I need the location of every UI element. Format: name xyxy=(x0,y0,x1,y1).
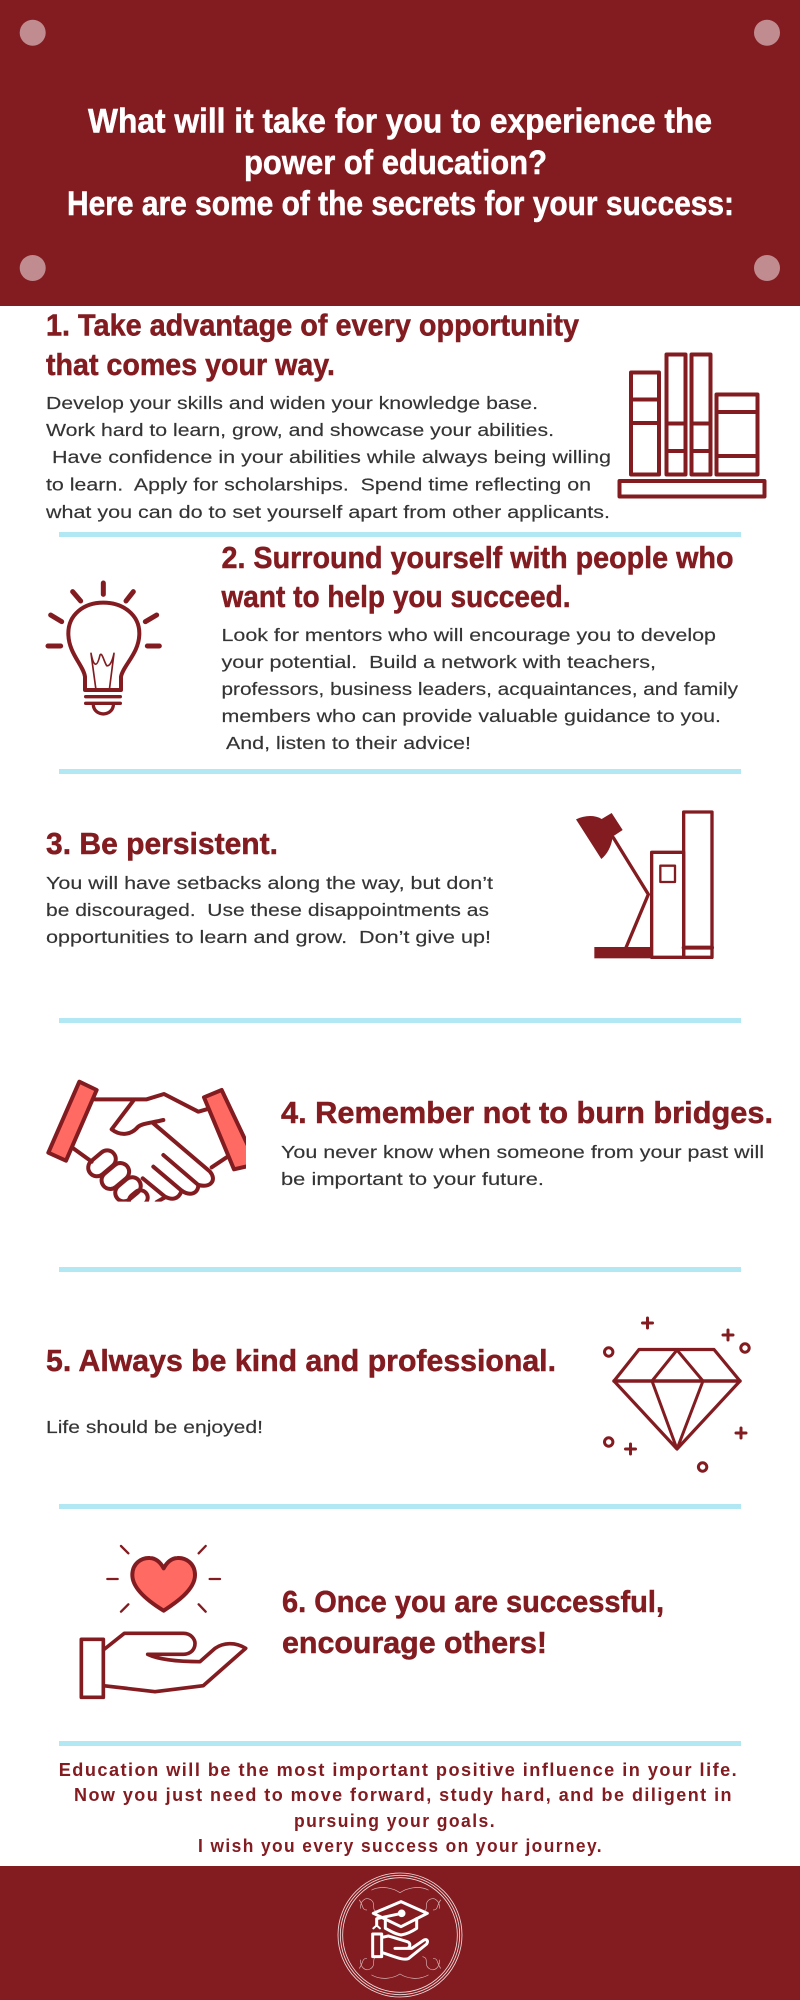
text block: tip 2: members who can provide valuable guidance to you. xyxy=(222,706,721,726)
heading: tip 2 xyxy=(221,540,734,614)
heading: tip 3: 3. Be persistent. xyxy=(46,826,278,861)
text block: tip 2: Look for mentors who will encourage you to develop xyxy=(222,625,716,645)
heading: tip 5: 5. Always be kind and professional. xyxy=(46,1343,556,1378)
text block: closing message: Now you just need to move forward, study hard, and be diligent in xyxy=(74,1784,733,1805)
panel: tip 6 xyxy=(81,1546,664,1697)
text block: tip 4: be important to your future. xyxy=(281,1169,544,1189)
title xyxy=(67,102,734,223)
text block: tip 3: be discouraged. Use these disappointments as xyxy=(46,900,489,920)
panel: footer band xyxy=(0,1866,800,2000)
icon: logo with graduation cap and hand xyxy=(338,1873,462,1997)
text block: closing message xyxy=(59,1759,738,1856)
text block: tip 2 xyxy=(222,625,738,753)
heading: tip 1: 1. Take advantage of every opportunity xyxy=(46,308,580,342)
heading: tip 1 xyxy=(46,308,580,382)
text block: tip 3: You will have setbacks along the way, but don’t xyxy=(46,873,493,893)
panel: tip 1 xyxy=(45,308,765,522)
text block: tip 4: You never know when someone from your past will xyxy=(281,1142,764,1162)
panel: tip 4 xyxy=(48,1082,773,1211)
text block: tip 1: to learn. Apply for scholarships. Spend time reflecting on xyxy=(46,474,591,494)
text block: closing message: Education will be the most important positive influence in your life. xyxy=(59,1759,738,1780)
panel: tip 2 xyxy=(48,540,738,753)
text block: tip 3 xyxy=(46,873,493,947)
title: What will it take for you to experience the xyxy=(88,102,712,140)
text block: tip 1: Work hard to learn, grow, and showcase your abilities. xyxy=(46,420,554,440)
text block: tip 2: your potential. Build a network with teachers, xyxy=(222,652,656,672)
heading: tip 1: that comes your way. xyxy=(46,347,335,382)
icon: desk lamp and books xyxy=(576,812,712,958)
heading: tip 6 xyxy=(282,1584,664,1660)
text block: tip 1: Have confidence in your abilities while always being willing xyxy=(52,447,611,467)
text block: tip 5: Life should be enjoyed! xyxy=(46,1417,263,1437)
panel: tip 5 xyxy=(46,1318,749,1471)
icon: light bulb xyxy=(48,583,159,714)
text block: tip 3: opportunities to learn and grow. Don’t give up! xyxy=(46,927,491,947)
text block: tip 4 xyxy=(281,1142,764,1189)
heading: tip 2: 2. Surround yourself with people who xyxy=(222,540,734,575)
heading: tip 6: 6. Once you are successful, xyxy=(282,1584,664,1619)
heading: tip 2: want to help you succeed. xyxy=(221,579,570,614)
text block: tip 1: what you can do to set yourself apart from other applicants. xyxy=(45,502,610,522)
text block: tip 2: And, listen to their advice! xyxy=(226,733,471,753)
icon: books on a shelf xyxy=(620,354,764,496)
text block: closing message: pursuing your goals. xyxy=(294,1810,496,1831)
text block: closing message: I wish you every success on your journey. xyxy=(198,1835,603,1856)
text block: tip 2: professors, business leaders, acquaintances, and family xyxy=(222,679,738,699)
icon: hand holding heart xyxy=(81,1546,246,1697)
heading: tip 6: encourage others! xyxy=(282,1625,547,1660)
icon: handshake xyxy=(48,1082,257,1211)
icon: diamond with sparkles xyxy=(604,1318,749,1471)
panel: tip 3 xyxy=(46,812,712,958)
text block: tip 1 xyxy=(45,393,611,522)
heading: tip 4: 4. Remember not to burn bridges. xyxy=(281,1095,773,1130)
title: power of education? xyxy=(244,144,547,182)
panel: header banner xyxy=(0,0,800,306)
text block: tip 1: Develop your skills and widen your knowledge base. xyxy=(46,393,538,413)
